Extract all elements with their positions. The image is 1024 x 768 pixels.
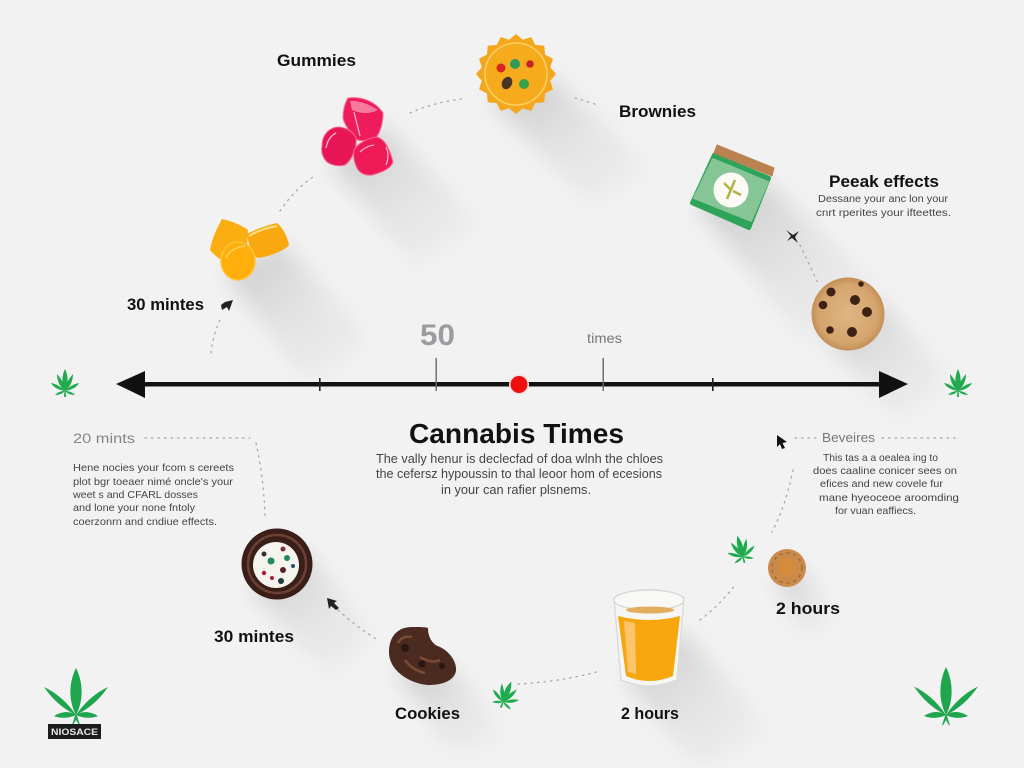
text block: beverages	[813, 431, 959, 517]
text block: beverages: mane hyeoceoe aroomding	[819, 492, 959, 504]
label: Brownies: Brownies	[619, 103, 696, 121]
label: 30 mintes upper: 30 mintes	[127, 296, 204, 314]
icon: brownie	[477, 35, 555, 113]
label: Cookies: Cookies	[395, 705, 460, 723]
icon: leaf bottom right	[914, 667, 978, 725]
icon: bitten chocolate cookie	[389, 627, 456, 685]
icon: green jar	[692, 145, 774, 228]
title and intro: Cannabis Times	[409, 418, 624, 449]
icon: sandwich cookie	[242, 528, 312, 600]
label: 2 hours small cookie: 2 hours	[776, 600, 840, 618]
icon: glass of juice	[614, 590, 684, 686]
text block: beverages: This tas a a oealea ing to	[823, 452, 938, 464]
icon: chocolate chip cookie	[812, 278, 884, 350]
icon: arrow near 30 mintes	[221, 300, 233, 311]
text block: peak effects: Peeak effects	[829, 173, 939, 191]
dotted journey path	[145, 98, 956, 684]
timeline axis	[116, 358, 908, 398]
title and intro: in your can rafier plsnems.	[441, 483, 591, 497]
icon: small cookie	[768, 549, 806, 587]
label: 2 hours glass: 2 hours	[621, 705, 679, 723]
text block: beverages: does caaline conicer sees on	[813, 465, 957, 477]
icon: orange gummies	[210, 219, 289, 280]
label: 30 mintes lower: 30 mintes	[214, 628, 294, 646]
icon: leaf near cookies	[488, 676, 524, 713]
text block: 20 mints: and lone your none fntoly	[73, 502, 196, 514]
icon: leaf axis left	[51, 369, 79, 397]
icon: pink gummies	[322, 98, 393, 175]
text block: beverages: for vuan eaffiecs.	[835, 505, 916, 517]
logo: bottom left: NIOSACE	[51, 727, 98, 738]
axis label: times: times	[587, 331, 622, 346]
icon: arrow near sandwich cookie	[327, 598, 339, 610]
logo: bottom left	[44, 668, 108, 739]
text block: 20 mints: 20 mints	[73, 431, 135, 446]
text block: peak effects: Dessane your anc lon your	[818, 193, 949, 205]
title and intro: The vally henur is declecfad of doa wlnh the chloes	[376, 452, 663, 466]
text block: peak effects	[816, 173, 951, 219]
axis label: 50: 50	[420, 319, 455, 352]
text block: 20 mints: Hene nocies your fcom s cereets	[73, 462, 234, 474]
text block: beverages: efices and new covele fur	[820, 478, 944, 490]
text block: 20 mints: weet s and CFARL dosses	[72, 489, 198, 501]
text block: 20 mints	[72, 431, 234, 528]
icon: leaf axis right	[944, 369, 972, 397]
title and intro: the cefersz hypoussin to thal leoor hom of ecesions	[376, 467, 662, 481]
text block: peak effects: cnrt rperites your ifteettes.	[816, 207, 951, 219]
drop shadows	[225, 75, 950, 768]
icon: arrow near jar	[786, 230, 799, 243]
label: Gummies: Gummies	[277, 52, 356, 70]
icon: arrow near beverages	[777, 435, 787, 449]
text block: 20 mints: coerzonrn and cndiue effects.	[73, 516, 217, 528]
text block: 20 mints: plot bgr toeaer nimé oncle's your	[73, 476, 234, 488]
text block: beverages: Beveires	[822, 431, 875, 445]
icon: leaf near small cookie	[724, 532, 758, 566]
title and intro	[376, 418, 663, 497]
